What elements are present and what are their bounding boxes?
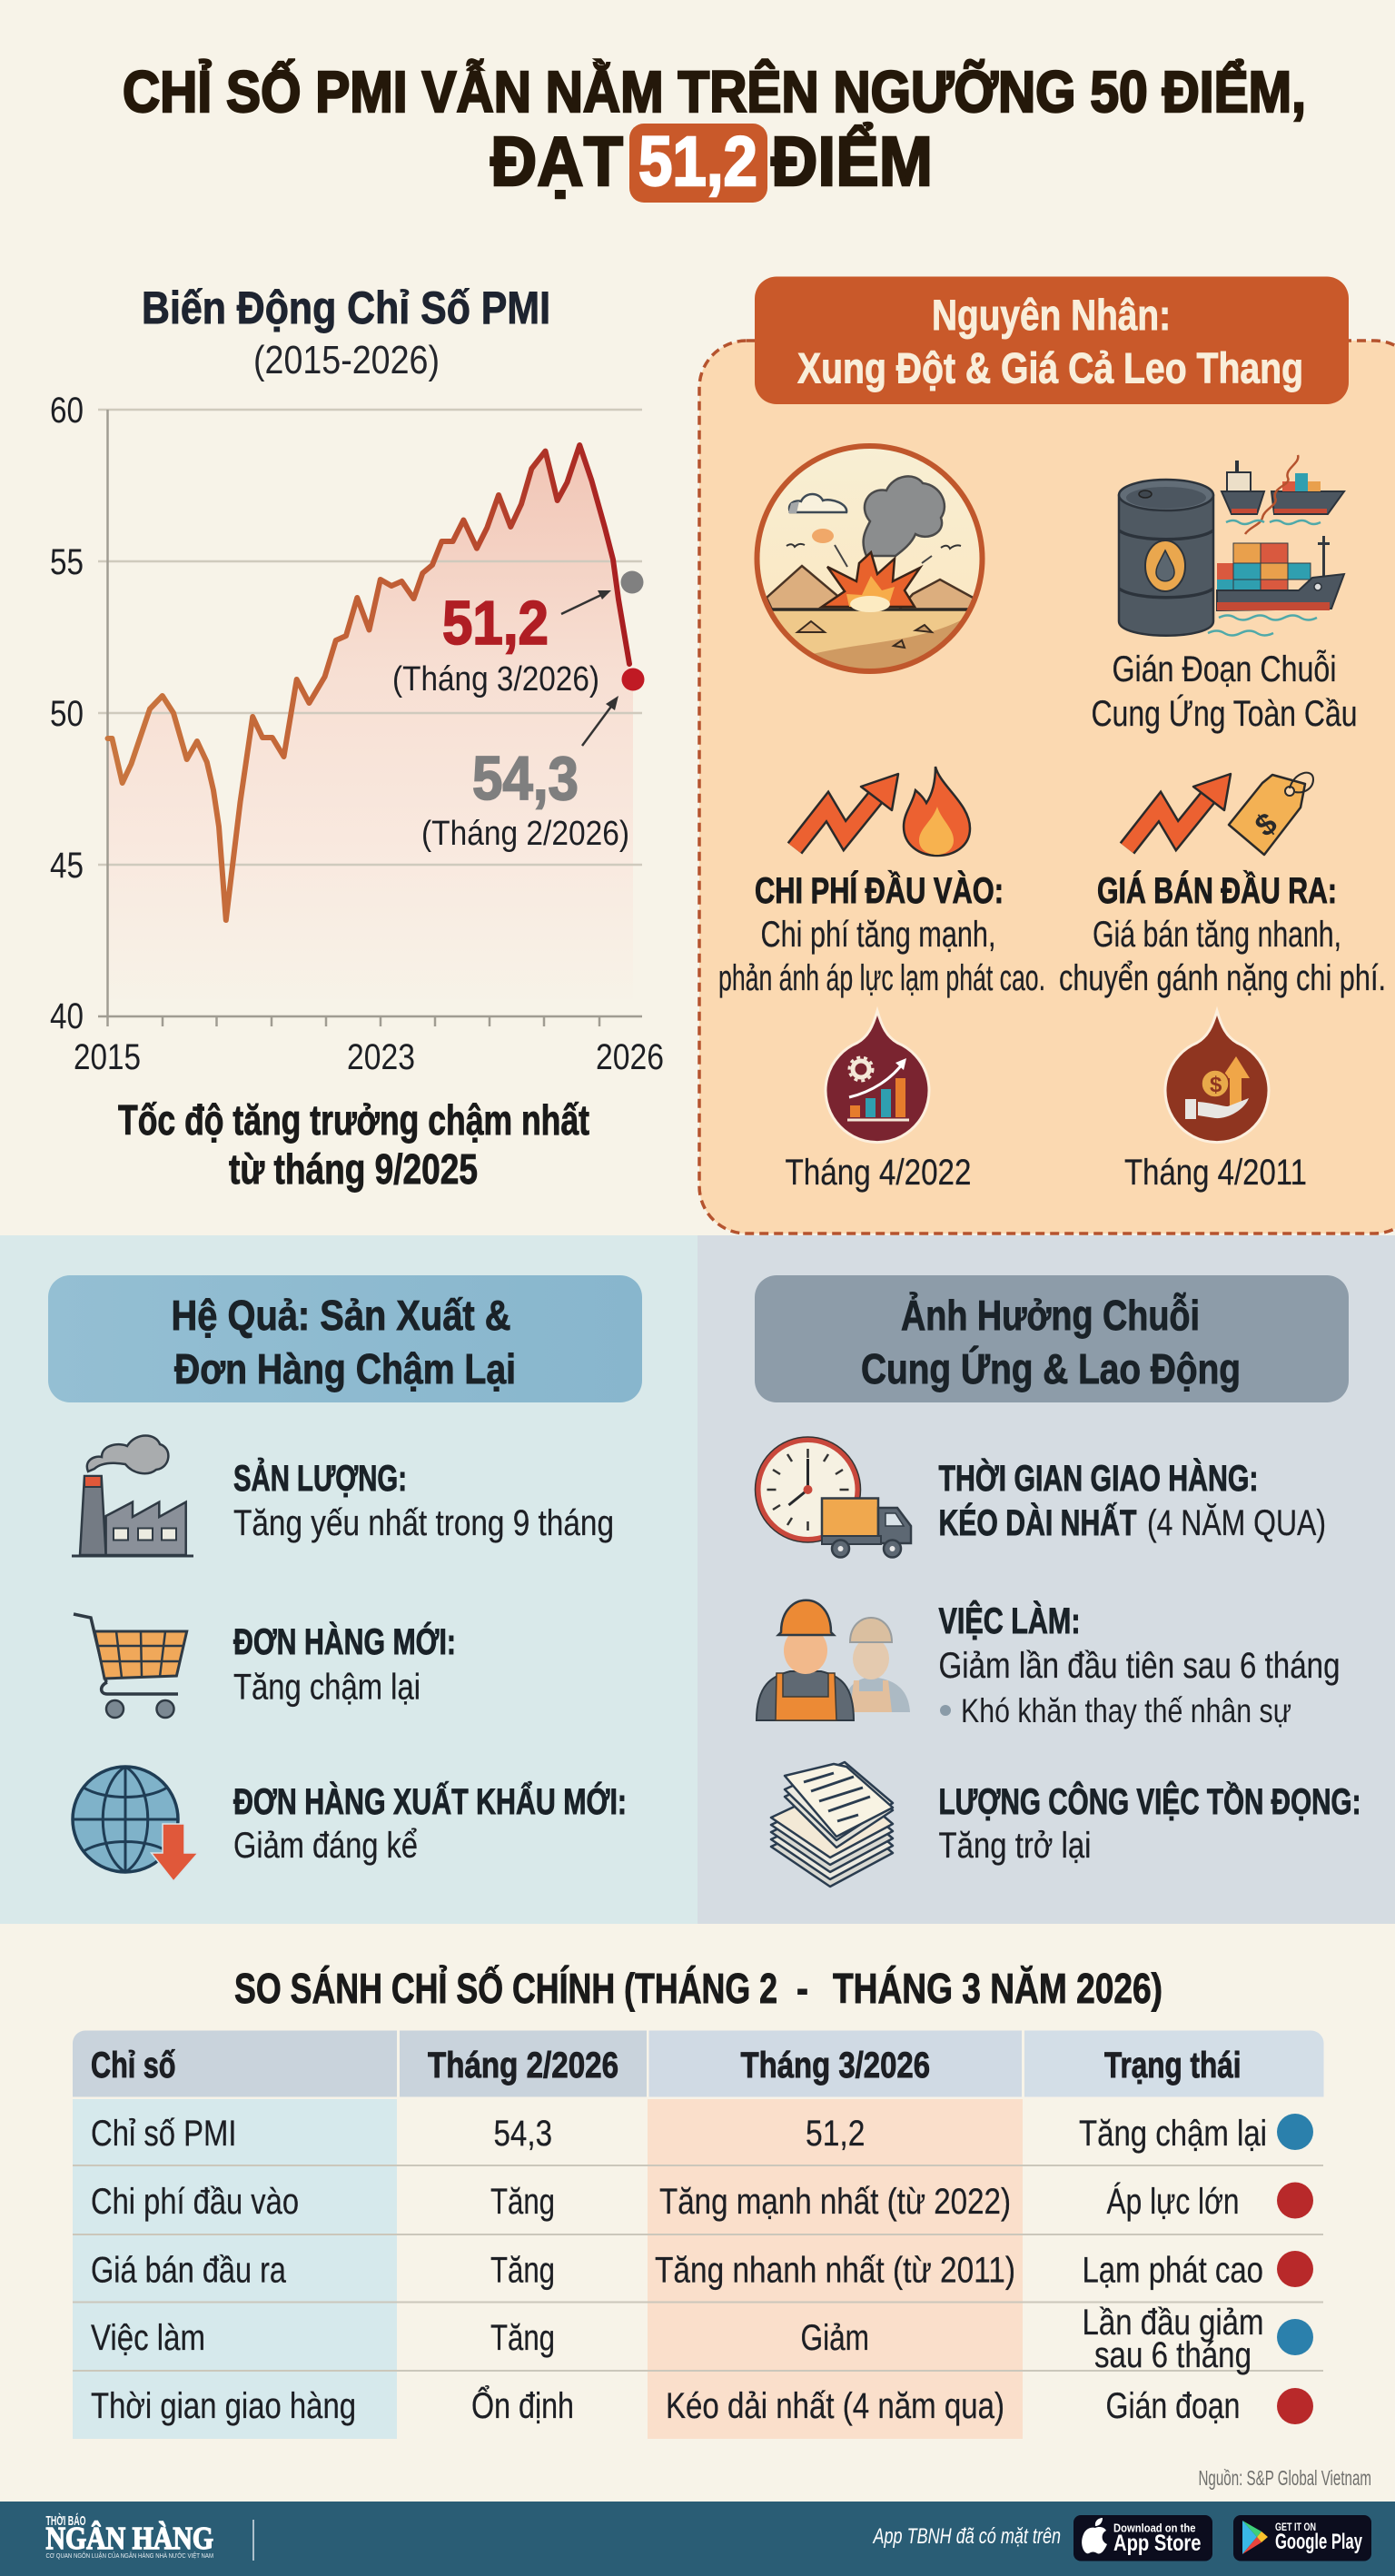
row: output prices	[91, 2251, 1313, 2291]
icon: rising arrow and price tag: $	[1249, 806, 1283, 844]
title: ĐẠT	[490, 123, 623, 201]
item: backlog: Tăng trở lại	[939, 1826, 1092, 1866]
row: PMI: 54,3	[494, 2114, 552, 2154]
callout: March 2026 value: 51,2	[442, 589, 549, 658]
logo	[45, 2512, 213, 2560]
item: export orders: Giảm đáng kể	[233, 1826, 418, 1866]
row: PMI: Chỉ số PMI	[91, 2114, 236, 2154]
label: supply disruption	[1092, 649, 1357, 734]
text: input costs	[718, 869, 1045, 998]
line chart: PMI 2015-2026: 55	[50, 542, 84, 582]
chart heading	[142, 282, 550, 382]
row: delivery time: Ổn định	[471, 2383, 574, 2426]
row: PMI	[91, 2114, 1313, 2154]
table header row: Chỉ số	[91, 2046, 176, 2086]
row: input costs: Tăng	[490, 2182, 555, 2222]
table header row: Tháng 2/2026	[428, 2046, 618, 2086]
callout: February 2026 value	[421, 696, 629, 853]
row: input costs: Tăng mạnh nhất (từ 2022)	[659, 2182, 1011, 2222]
item: delivery time	[939, 1457, 1326, 1543]
icon: globe with down arrow	[73, 1767, 198, 1881]
badge: Google Play	[1233, 2515, 1371, 2561]
table header row: Trạng thái	[1104, 2046, 1241, 2086]
item: new orders	[233, 1620, 456, 1708]
item: output	[233, 1457, 614, 1543]
icon: explosion scene	[754, 446, 990, 682]
panel: consequences content	[48, 1275, 642, 1881]
item: delivery time: (4 NĂM QUA)	[1147, 1502, 1326, 1543]
row: output prices: Tăng nhanh nhất (từ 2011)	[655, 2251, 1015, 2291]
icon: oil barrel and ships	[1119, 455, 1344, 636]
callout: March 2026 value	[392, 589, 611, 698]
table header row: Tháng 3/2026	[741, 2046, 930, 2086]
icon: workers	[757, 1600, 910, 1720]
label: April 2011: Tháng 4/2011	[1124, 1153, 1307, 1193]
causes header	[755, 276, 1349, 404]
panel: supply chain background	[698, 1235, 1395, 1924]
barrel	[1119, 480, 1213, 636]
icon: industrial drop	[826, 1011, 929, 1143]
chart caption: từ tháng 9/2025	[229, 1145, 478, 1193]
text: output prices	[1059, 869, 1386, 998]
row: employment: sau 6 tháng	[1094, 2335, 1252, 2375]
item: employment: VIỆC LÀM:	[939, 1600, 1081, 1641]
item: delivery time: KÉO DÀI NHẤT	[939, 1501, 1137, 1543]
title	[123, 58, 1306, 203]
table heading: THÁNG 3 NĂM 2026)	[833, 1965, 1162, 2012]
footer	[0, 2502, 1395, 2576]
badge: Google Play: GET IT ON	[1275, 2522, 1316, 2533]
row: input costs	[91, 2181, 1313, 2222]
title: 51,2	[638, 123, 757, 201]
item: employment: Khó khăn thay thế nhân sự	[961, 1692, 1291, 1729]
row: delivery time: Kéo dải nhất (4 năm qua)	[666, 2386, 1004, 2426]
row: output prices: Giá bán đầu ra	[91, 2251, 287, 2291]
item: output: SẢN LƯỢNG:	[233, 1457, 407, 1499]
row: input costs: Áp lực lớn	[1106, 2181, 1239, 2222]
line chart: PMI 2015-2026: 60	[50, 391, 84, 431]
panel: causes	[699, 276, 1395, 1234]
item: new orders: Tăng chậm lại	[233, 1668, 420, 1708]
icon: clock and truck	[756, 1437, 911, 1557]
chart caption	[118, 1096, 589, 1193]
logo: NGÂN HÀNG	[45, 2520, 213, 2556]
chart heading: (2015-2026)	[253, 338, 440, 382]
icon: factory	[72, 1435, 193, 1556]
supply chain header: Ảnh Hưởng Chuỗi	[901, 1292, 1200, 1339]
small container ship	[1271, 473, 1344, 514]
line chart: PMI 2015-2026: 40	[50, 996, 84, 1036]
panel: supply chain content	[755, 1275, 1360, 1887]
text: input costs: CHI PHÍ ĐẦU VÀO:	[755, 869, 1004, 911]
row: employment: Tăng	[490, 2318, 555, 2358]
item: backlog	[939, 1780, 1360, 1866]
row: output prices: Tăng	[490, 2251, 555, 2291]
table heading: -	[796, 1965, 808, 2012]
row: employment: Lần đầu giảm	[1083, 2303, 1264, 2343]
row: output prices: Lạm phát cao	[1083, 2251, 1263, 2291]
text: input costs: Chi phí tăng mạnh,	[761, 915, 995, 955]
front worker	[757, 1600, 854, 1720]
row: delivery time: Thời gian giao hàng	[91, 2386, 356, 2426]
supply chain header	[755, 1275, 1349, 1402]
row: PMI: Tăng chậm lại	[1079, 2114, 1267, 2154]
causes header: Nguyên Nhân:	[932, 291, 1171, 339]
icon: rising arrow and price tag	[1127, 773, 1313, 855]
row: delivery time: Gián đoạn	[1106, 2386, 1241, 2426]
line chart: PMI 2015-2026: 2015	[74, 1037, 141, 1077]
callout: March 2026 value: (Tháng 3/2026)	[392, 660, 599, 698]
comparison table	[73, 2030, 1324, 2439]
label: April 2022: Tháng 4/2022	[785, 1153, 972, 1193]
badge: App Store: Download on the	[1113, 2522, 1196, 2534]
logo: CƠ QUAN NGÔN LUẬN CỦA NGÂN HÀNG NHÀ NƯỚC VIỆT NAM	[45, 2551, 213, 2560]
title: ĐIỂM	[771, 122, 933, 201]
row: employment: Giảm	[801, 2318, 869, 2358]
icon: money drop	[1165, 1011, 1269, 1143]
icon: rising arrow and flame	[795, 767, 970, 856]
item: export orders: ĐƠN HÀNG XUẤT KHẨU MỚI:	[233, 1779, 627, 1822]
row: PMI: 51,2	[806, 2114, 865, 2154]
small tanker	[1222, 461, 1264, 514]
callout: February 2026 value: 54,3	[472, 744, 579, 813]
large container ship	[1208, 536, 1344, 636]
row: employment	[91, 2303, 1313, 2375]
item: export orders	[233, 1779, 627, 1866]
line chart: PMI 2015-2026	[50, 391, 664, 1077]
line chart: PMI 2015-2026: 45	[50, 846, 84, 886]
label: supply disruption: Gián Đoạn Chuỗi	[1112, 649, 1337, 689]
consequences header: Hệ Quả: Sản Xuất &	[171, 1292, 510, 1339]
text: input costs: phản ánh áp lực lạm phát cao.	[718, 958, 1045, 998]
badge: App Store: App Store	[1113, 2531, 1202, 2556]
table header row	[73, 2030, 1324, 2096]
row: employment: Việc làm	[91, 2318, 205, 2358]
icon: document stack	[771, 1762, 893, 1887]
line chart: PMI 2015-2026: 50	[50, 694, 84, 734]
line chart: PMI 2015-2026: 2026	[596, 1037, 664, 1077]
disruption line	[1245, 455, 1298, 534]
row: delivery time	[91, 2383, 1313, 2426]
item: employment	[939, 1600, 1341, 1729]
chart heading: Biến Động Chỉ Số PMI	[142, 282, 550, 333]
item: output: Tăng yếu nhất trong 9 tháng	[233, 1503, 614, 1543]
badge: App Store	[1073, 2515, 1212, 2561]
callout: February 2026 value: (Tháng 2/2026)	[421, 815, 629, 853]
icon: shopping cart	[74, 1614, 187, 1718]
panel: consequences background	[0, 1235, 698, 1924]
app availability note: App TBNH đã có mặt trên	[872, 2524, 1061, 2549]
back worker	[845, 1618, 910, 1712]
supply chain header: Cung Ứng & Lao Động	[861, 1345, 1241, 1392]
consequences header	[48, 1275, 642, 1402]
line chart: PMI 2015-2026: 2023	[347, 1037, 415, 1077]
row: input costs: Chi phí đầu vào	[91, 2182, 299, 2222]
logo: THỜI BÁO	[45, 2512, 86, 2529]
item: new orders: ĐƠN HÀNG MỚI:	[233, 1620, 456, 1662]
table heading: SO SÁNH CHỈ SỐ CHÍNH (THÁNG 2	[234, 1965, 777, 2012]
item: delivery time: THỜI GIAN GIAO HÀNG:	[939, 1457, 1259, 1499]
consequences header: Đơn Hàng Chậm Lại	[174, 1345, 516, 1392]
causes header: Xung Đột & Giá Cả Leo Thang	[797, 343, 1303, 392]
chart caption: Tốc độ tăng trưởng chậm nhất	[118, 1096, 589, 1144]
icon: money drop: $	[1210, 1073, 1222, 1097]
